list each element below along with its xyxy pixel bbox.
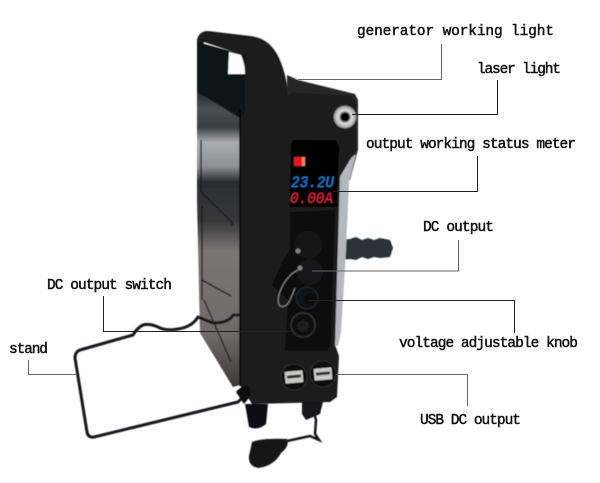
callout: DC output xyxy=(312,220,494,271)
front body xyxy=(240,92,356,404)
callout: laser light xyxy=(352,62,561,114)
callout: DC output switch xyxy=(47,278,294,332)
voltage knob xyxy=(296,287,318,309)
carrying handle xyxy=(197,31,290,140)
callout: USB DC output xyxy=(336,374,521,429)
stand pivot xyxy=(236,386,251,404)
callout: output working status meter xyxy=(333,137,576,192)
DC output caps xyxy=(278,231,323,307)
callout: DC output switch: DC output switch xyxy=(47,278,172,294)
side panel xyxy=(197,85,240,387)
USB ports xyxy=(281,361,336,390)
product: portable generator xyxy=(75,31,393,468)
current readout: 0.00A xyxy=(290,190,333,208)
silver side edge xyxy=(333,154,356,346)
rubber dust cap with strap xyxy=(249,405,319,468)
callout: USB DC output: USB DC output xyxy=(420,413,521,429)
callout: voltage adjustable knob xyxy=(308,300,578,352)
callout: output working status meter: output working status meter xyxy=(366,137,576,153)
laser light xyxy=(334,106,356,128)
callout: generator working light: generator working light xyxy=(357,24,554,40)
feet xyxy=(245,402,323,428)
callout: generator working light xyxy=(298,24,554,80)
handle opening xyxy=(228,52,245,74)
callout: laser light: laser light xyxy=(477,62,561,78)
working light indicator xyxy=(294,157,305,166)
callout: stand: stand xyxy=(9,342,48,358)
callout: voltage adjustable knob: voltage adjustable knob xyxy=(399,336,578,352)
display recess xyxy=(290,140,339,208)
rear top housing xyxy=(287,75,358,180)
hose connector xyxy=(340,237,393,260)
callout: DC output: DC output xyxy=(423,220,494,236)
output recess xyxy=(272,210,335,351)
switch xyxy=(291,313,315,337)
voltage readout: 23.2U xyxy=(291,174,334,192)
stand wire frame xyxy=(75,315,248,437)
callout: stand xyxy=(9,342,76,374)
